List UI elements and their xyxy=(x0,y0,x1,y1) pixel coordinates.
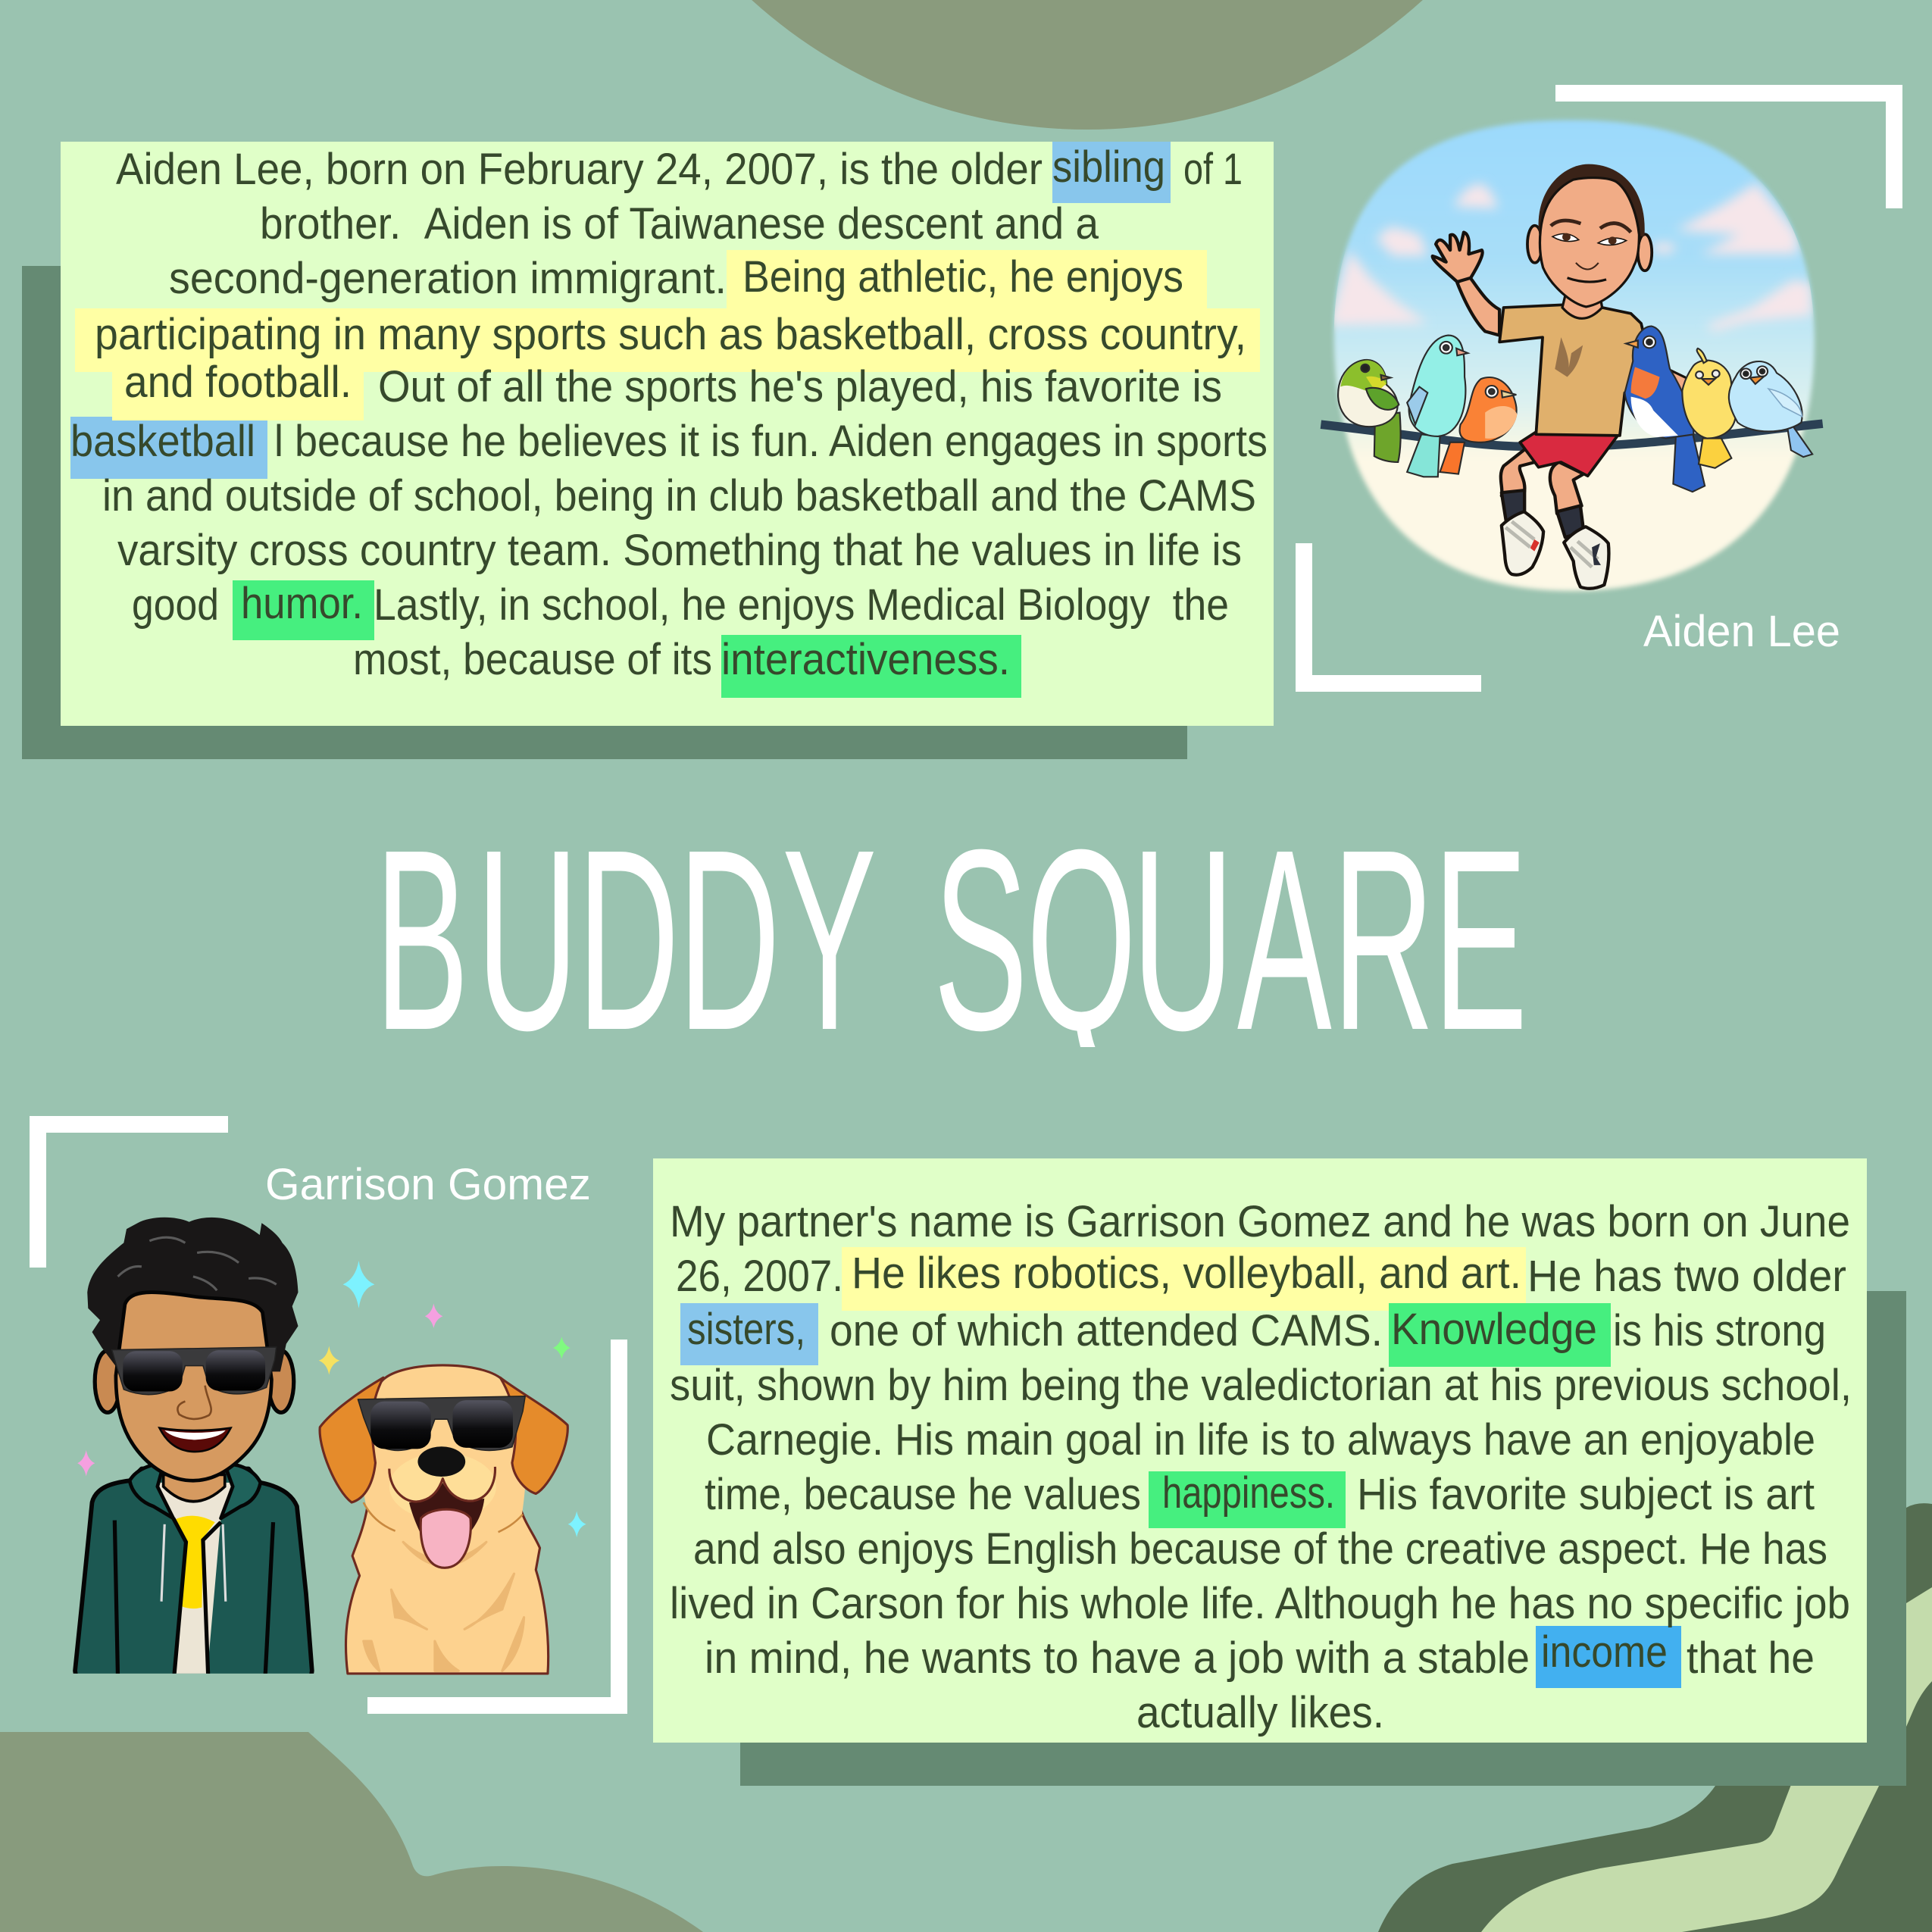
text block: Aiden biography xyxy=(70,142,1268,684)
yellow bird xyxy=(1682,349,1736,468)
text block: Garrison biography: is his strong xyxy=(1613,1306,1826,1355)
decorative bottom-left blob xyxy=(0,1732,703,1932)
text block: Garrison biography: suit, shown by him being the valedictorian at his previous school, xyxy=(670,1361,1852,1410)
text block: Aiden biography: interactiveness. xyxy=(721,635,1010,684)
head xyxy=(363,1366,527,1540)
text block: Garrison biography: and also enjoys English because of the creative aspect. He has xyxy=(693,1524,1827,1574)
shirt xyxy=(1499,305,1653,436)
text block: Aiden biography: Out of all the sports he's played, his favorite is xyxy=(378,362,1222,411)
illustration: Aiden avatar with birds on a wire xyxy=(1321,120,1823,591)
text block: Aiden biography: basketball xyxy=(70,417,255,466)
text block: Aiden biography: humor. xyxy=(241,579,363,628)
text block: Aiden biography: l because he believes it is fun. Aiden engages in sports xyxy=(274,417,1268,466)
highlight: income xyxy=(1536,1626,1681,1688)
highlight: interactiveness xyxy=(721,635,1021,698)
red shorts xyxy=(1520,430,1618,476)
waving arm xyxy=(1433,233,1499,336)
text block: Garrison biography: actually likes. xyxy=(1136,1688,1384,1737)
boy xyxy=(75,1218,312,1685)
panel shadow: Aiden xyxy=(22,266,1187,759)
bracket: bottom left of Aiden portrait xyxy=(1296,543,1481,692)
text block: Aiden biography: in and outside of school, being in club basketball and the CAMS xyxy=(102,471,1256,521)
sparkles xyxy=(77,1261,586,1537)
cheek lines xyxy=(364,1502,523,1532)
text block: Garrison biography: lived in Carson for his whole life. Although he has no specific job xyxy=(670,1579,1850,1628)
fur marks xyxy=(364,1542,524,1671)
text block: Aiden biography: second-generation immigrant. xyxy=(169,254,727,303)
smile line xyxy=(389,1467,496,1502)
bracket: top left of Garrison portrait xyxy=(30,1116,228,1268)
text block: Aiden biography: varsity cross country team. Something that he values in life is xyxy=(117,526,1242,575)
left ear xyxy=(320,1377,383,1502)
wire xyxy=(1321,424,1823,447)
dog xyxy=(320,1365,567,1674)
text block: Garrison biography: sisters, xyxy=(687,1305,805,1354)
highlight: happiness xyxy=(1149,1471,1346,1528)
decorative bottom-right light wave xyxy=(1481,1587,1932,1932)
tongue xyxy=(420,1509,470,1568)
highlight: athletic sentence line 2 xyxy=(75,308,1260,372)
smile xyxy=(159,1428,231,1452)
light blue bird xyxy=(1729,361,1812,457)
text block: Garrison biography: happiness. xyxy=(1162,1468,1335,1518)
text block: Garrison biography: 26, 2007. xyxy=(676,1252,843,1301)
highlight: robotics sentence xyxy=(842,1247,1526,1311)
text block: Garrison biography: income xyxy=(1541,1627,1668,1677)
text block: Garrison biography: He has two older xyxy=(1527,1252,1846,1301)
text block: Aiden biography: sibling xyxy=(1052,142,1165,192)
legs and shoes xyxy=(1501,449,1608,589)
bracket: top right of Aiden portrait xyxy=(1555,85,1902,208)
text block: Garrison biography: that he xyxy=(1687,1633,1815,1683)
illustration: Garrison avatar with dog xyxy=(75,1218,586,1685)
highlight: humor xyxy=(233,580,374,640)
orange bird xyxy=(1440,377,1517,474)
head top outline xyxy=(381,1365,504,1381)
face xyxy=(116,1293,271,1480)
hood xyxy=(130,1465,261,1518)
text block: Garrison biography xyxy=(670,1197,1852,1737)
highlight: basketball xyxy=(70,417,267,479)
head xyxy=(1527,164,1652,318)
text block: Aiden biography: and football. xyxy=(124,358,352,407)
mouth xyxy=(409,1483,484,1534)
hair xyxy=(87,1218,298,1371)
title: BUDDY SQUARE xyxy=(374,797,1527,1084)
label: Garrison Gomez: Garrison Gomez xyxy=(265,1160,591,1209)
nose xyxy=(417,1446,465,1477)
sky background xyxy=(1329,120,1815,591)
teal bird xyxy=(1407,336,1468,477)
body xyxy=(345,1506,549,1674)
text block: Garrison biography: His favorite subject is art xyxy=(1357,1470,1815,1519)
highlight: Knowledge xyxy=(1389,1303,1611,1367)
text block: Aiden biography: brother. Aiden is of Taiwanese descent and a xyxy=(260,199,1099,249)
text block: Aiden biography: Being athletic, he enjoys xyxy=(742,252,1183,302)
sunglasses xyxy=(358,1396,525,1450)
green bird xyxy=(1338,360,1401,462)
text block: Aiden biography: of 1 xyxy=(1183,145,1243,194)
text block: Garrison biography: Knowledge xyxy=(1391,1305,1597,1354)
text block: Garrison biography: one of which attended CAMS. xyxy=(830,1306,1383,1355)
panel: Aiden biography xyxy=(61,142,1274,726)
blue bird xyxy=(1624,327,1705,492)
shirt logo xyxy=(174,1516,215,1608)
decorative top semicircle xyxy=(588,0,1587,130)
highlight: athletic sentence line 3 xyxy=(112,372,364,420)
muzzle xyxy=(389,1453,496,1521)
jacket xyxy=(75,1469,312,1685)
back arm xyxy=(1664,367,1688,392)
panel: Garrison biography xyxy=(653,1158,1867,1743)
panel shadow: Garrison xyxy=(740,1291,1906,1786)
label: Aiden Lee: Aiden Lee xyxy=(1643,607,1840,656)
highlight: sisters xyxy=(680,1303,818,1365)
text block: Aiden biography: Aiden Lee, born on February 24, 2007, is the older xyxy=(116,145,1043,194)
text block: Garrison biography: Carnegie. His main goal in life is to always have an enjoyable xyxy=(706,1415,1815,1465)
text block: Aiden biography: Lastly, in school, he enjoys Medical Biology the xyxy=(374,580,1229,630)
text block: Aiden biography: most, because of its xyxy=(353,635,712,684)
text block: Garrison biography: in mind, he wants to have a job with a stable xyxy=(705,1633,1530,1683)
text block: Garrison biography: He likes robotics, volleyball, and art. xyxy=(852,1249,1521,1298)
jacket seams and drawstrings xyxy=(114,1518,274,1677)
text block: Aiden biography: participating in many sports such as basketball, cross country, xyxy=(95,310,1246,359)
hair highlights xyxy=(118,1237,277,1290)
bracket: bottom right of Garrison portrait xyxy=(367,1340,627,1714)
decorative bottom-right dark wave xyxy=(1378,1503,1932,1932)
highlight: sibling xyxy=(1052,142,1171,203)
sunglasses xyxy=(112,1347,277,1395)
text block: Garrison biography: My partner's name is Garrison Gomez and he was born on June xyxy=(670,1197,1850,1246)
neck xyxy=(164,1474,225,1502)
nose xyxy=(177,1386,211,1419)
text block: Garrison biography: time, because he values xyxy=(705,1470,1141,1519)
right ear xyxy=(500,1377,567,1493)
ears xyxy=(95,1351,120,1412)
t-shirt xyxy=(155,1483,233,1677)
highlight: athletic sentence line 1 xyxy=(727,250,1207,308)
text block: Aiden biography: good xyxy=(132,580,219,630)
